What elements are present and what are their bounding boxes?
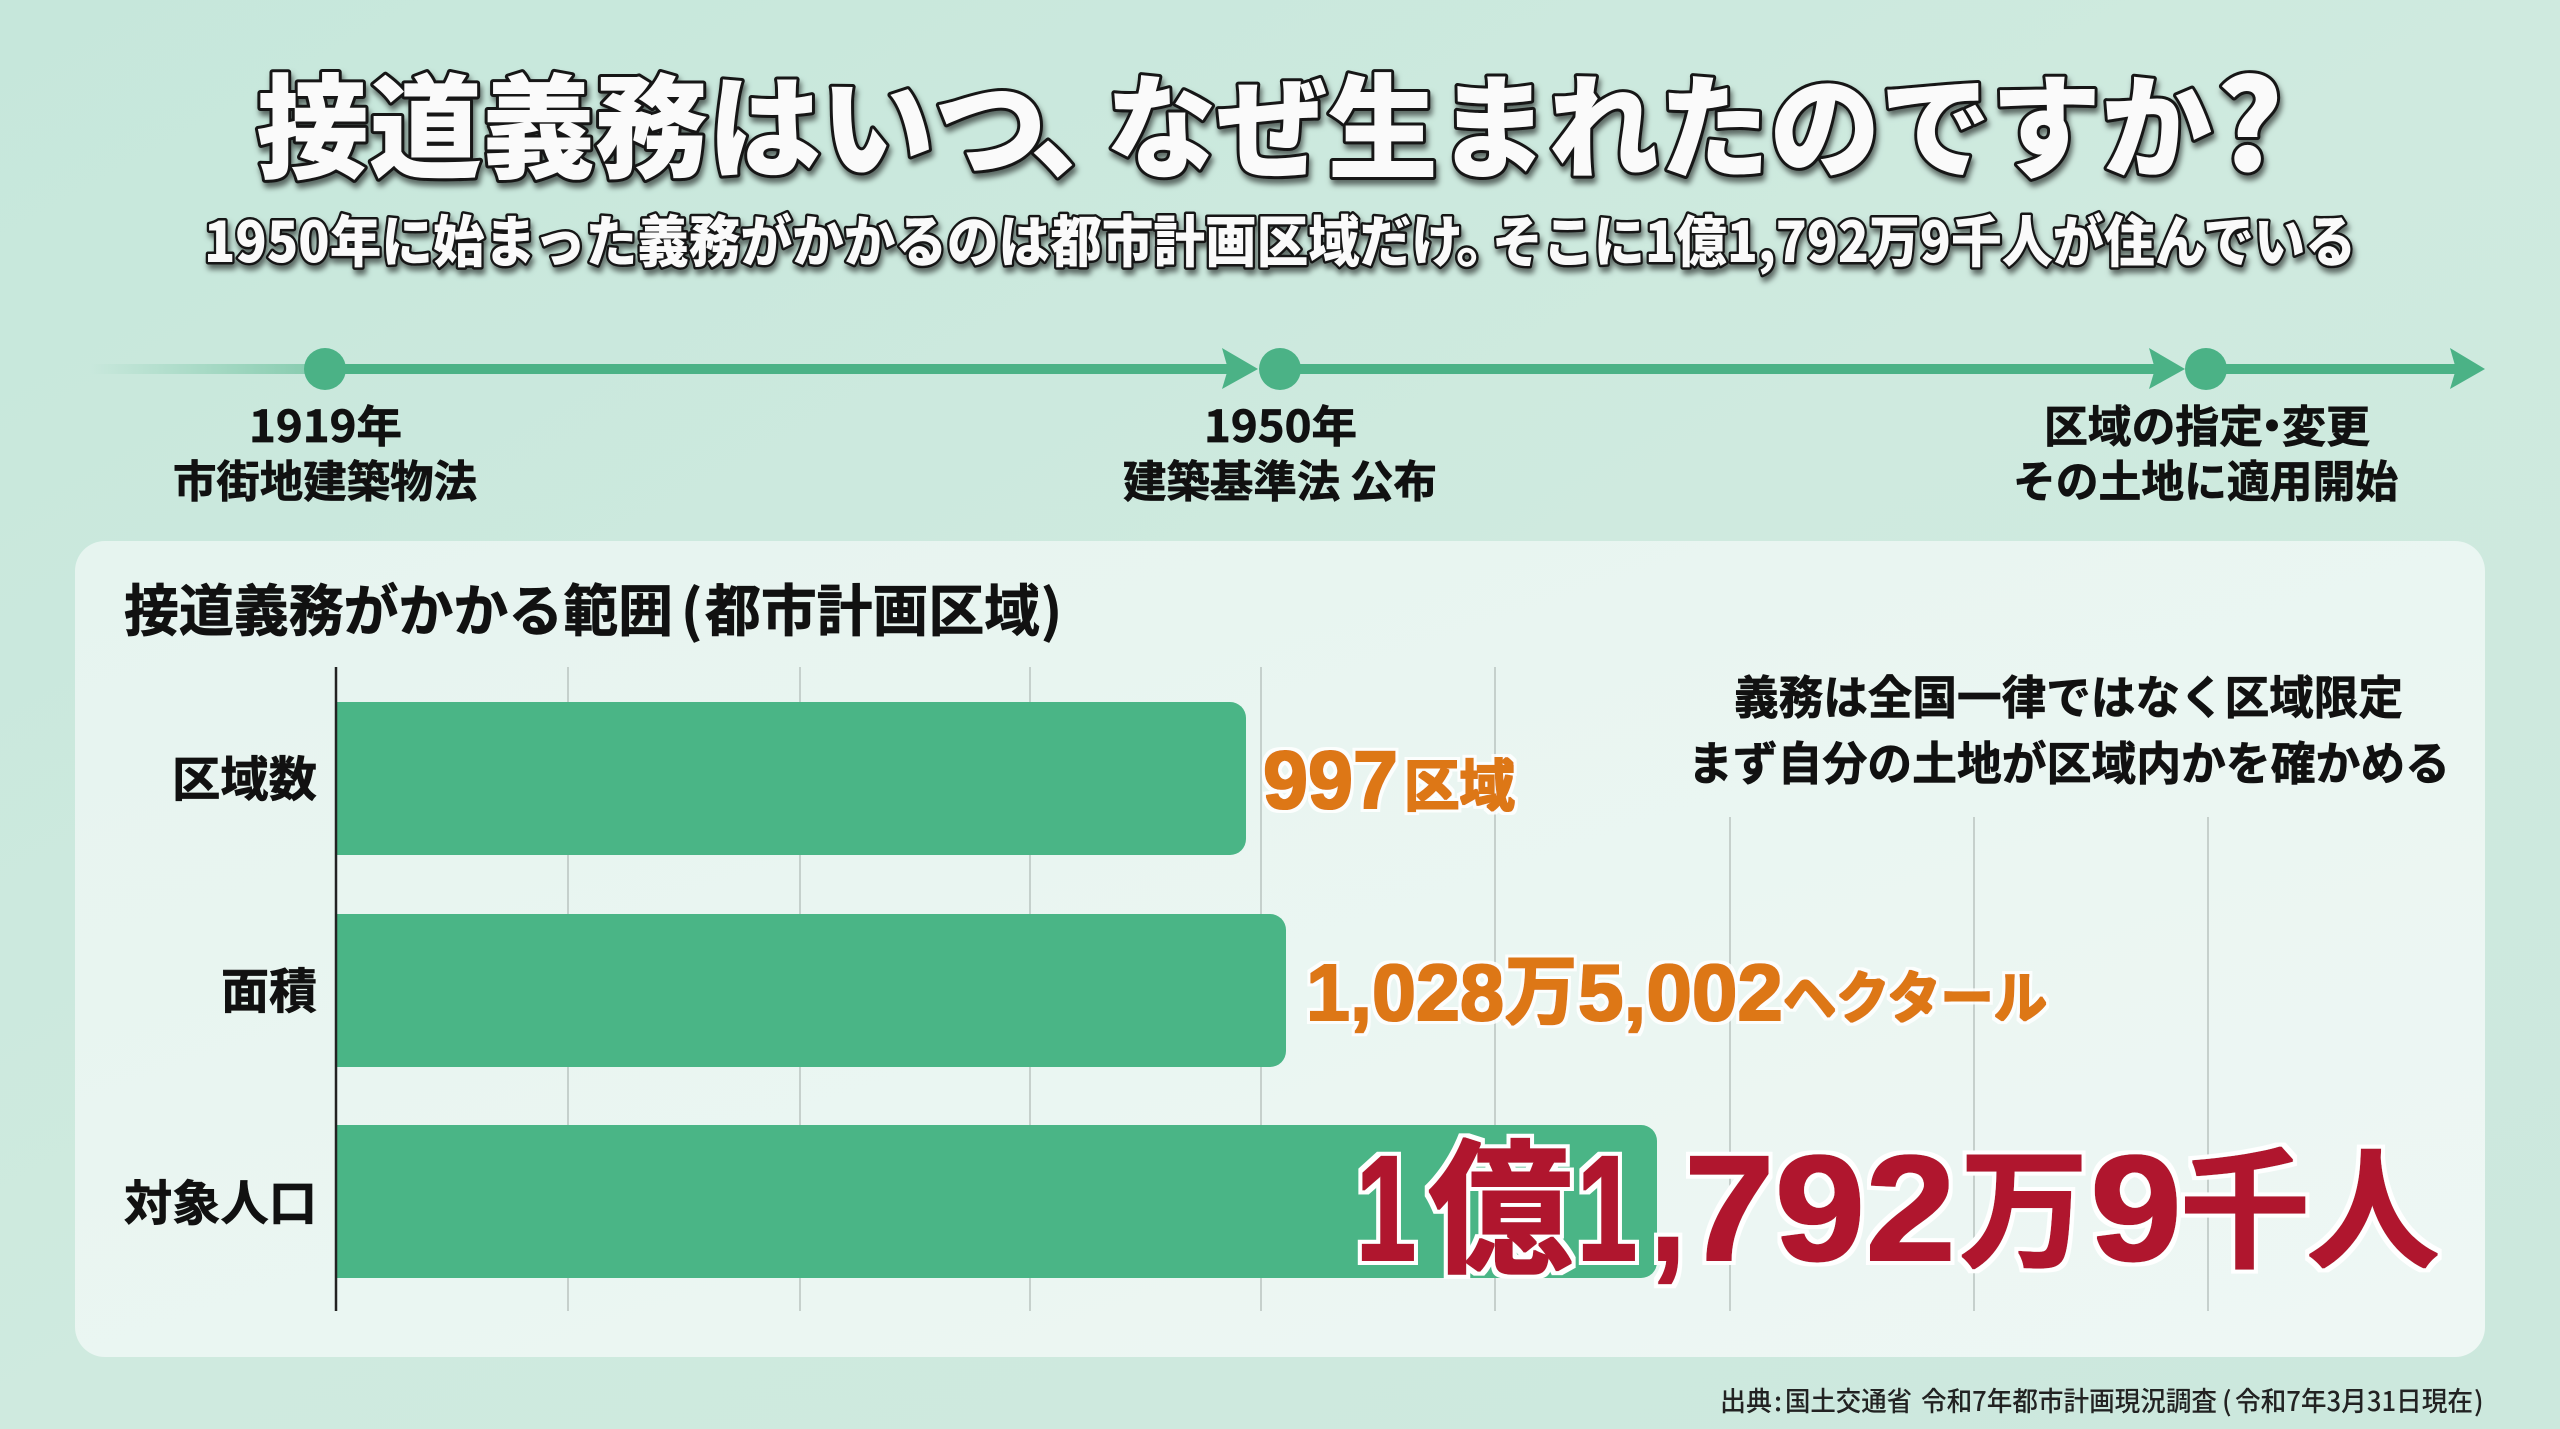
panel heading: 都市計画区域 xyxy=(705,567,1040,648)
source note: 令和7年3月31日現在 xyxy=(2235,1380,2473,1419)
callout note: 義務は全国一律ではなく区域限定 xyxy=(1734,662,2403,728)
timeline label: 1950: 建築基準法 公布 xyxy=(1123,446,1437,510)
panel heading: ( xyxy=(681,567,702,648)
source note: : xyxy=(1774,1380,1782,1419)
timeline label: designation xyxy=(2013,391,2398,510)
bar: population xyxy=(336,1125,1657,1278)
value: districts: 区域 xyxy=(1404,742,1515,823)
marker: 1919 xyxy=(304,348,346,390)
timeline label: 1919: 市街地建築物法 xyxy=(173,446,477,510)
title xyxy=(256,26,2283,207)
row label: districts: 区域数 xyxy=(172,740,317,810)
arrow: timeline end xyxy=(2450,348,2485,389)
source note: 国土交通省 xyxy=(1785,1380,1912,1419)
callout note: まず自分の土地が区域内かを確かめる xyxy=(1688,728,2450,794)
timeline label: 1950: 1950年 xyxy=(1204,391,1357,455)
panel background xyxy=(75,541,2485,1357)
title: ? xyxy=(2216,26,2283,207)
value: population: 万 xyxy=(1960,1107,2088,1295)
timeline label: 1919 xyxy=(173,391,477,510)
title: 、 xyxy=(1030,38,1143,202)
panel: scope chart xyxy=(75,541,2485,1357)
source note: 令和7年都市計画現況調査 xyxy=(1921,1380,2217,1419)
bar: districts xyxy=(336,702,1246,855)
axis xyxy=(335,667,337,1311)
value: area xyxy=(1306,930,2047,1040)
timeline label: designation: ・ xyxy=(2250,391,2294,455)
timeline label: designation: 変更 xyxy=(2282,391,2370,455)
value: population: 1 xyxy=(1356,1124,1416,1292)
source note: 出典 xyxy=(1720,1380,1772,1419)
title: 接道義務はいつ xyxy=(256,38,1047,202)
bar chart xyxy=(124,667,2439,1311)
source note: ) xyxy=(2474,1380,2484,1419)
value: area: 万 xyxy=(1505,930,1577,1040)
source note xyxy=(1720,1380,2484,1419)
value: area: 5,002 xyxy=(1578,948,1783,1037)
panel heading: ) xyxy=(1041,567,1062,648)
panel heading xyxy=(124,567,1062,648)
value: population: 千 xyxy=(2180,1107,2310,1295)
value: population: 人 xyxy=(2307,1107,2439,1295)
value: districts xyxy=(1263,735,1515,826)
timeline xyxy=(90,348,2485,510)
row label: population: 対象人口 xyxy=(124,1164,317,1234)
arrow: to 1950 xyxy=(1222,348,1258,389)
subtitle: 。 xyxy=(1456,198,1512,279)
subtitle xyxy=(204,198,2356,279)
source note: ( xyxy=(2222,1380,2232,1419)
panel heading: 接道義務がかかる範囲 xyxy=(124,567,673,648)
value: population: 792 xyxy=(1684,1124,1956,1292)
value: area: 1,028 xyxy=(1306,948,1504,1037)
row label: area: 面積 xyxy=(221,952,317,1022)
callout note xyxy=(1688,662,2450,794)
value: population: 億 xyxy=(1428,1093,1573,1303)
subtitle: 1950年に始まった義務がかかるのは都市計画区域だけ xyxy=(204,198,1463,279)
value: population: 9 xyxy=(2090,1124,2182,1292)
subtitle: そこに1億1,792万9千人が住んでいる xyxy=(1492,198,2356,279)
marker: designation xyxy=(2185,348,2227,390)
timeline label: 1919: 1919年 xyxy=(249,391,402,455)
value: population: , xyxy=(1650,1124,1686,1292)
value: population: 1 xyxy=(1577,1124,1637,1292)
bar: area xyxy=(336,914,1286,1067)
arrow: to designation xyxy=(2149,348,2185,389)
timeline label: designation: 区域の指定 xyxy=(2044,391,2263,455)
timeline label: designation: その土地に適用開始 xyxy=(2013,446,2398,510)
timeline label: 1950 xyxy=(1123,391,1437,510)
value: area: ヘクタール xyxy=(1783,954,2047,1035)
value: population xyxy=(1356,1093,2439,1303)
value: districts: 997 xyxy=(1263,735,1398,826)
title: なぜ生まれたのですか xyxy=(1106,38,2212,202)
timeline line xyxy=(90,364,2456,374)
marker: 1950 xyxy=(1259,348,1301,390)
